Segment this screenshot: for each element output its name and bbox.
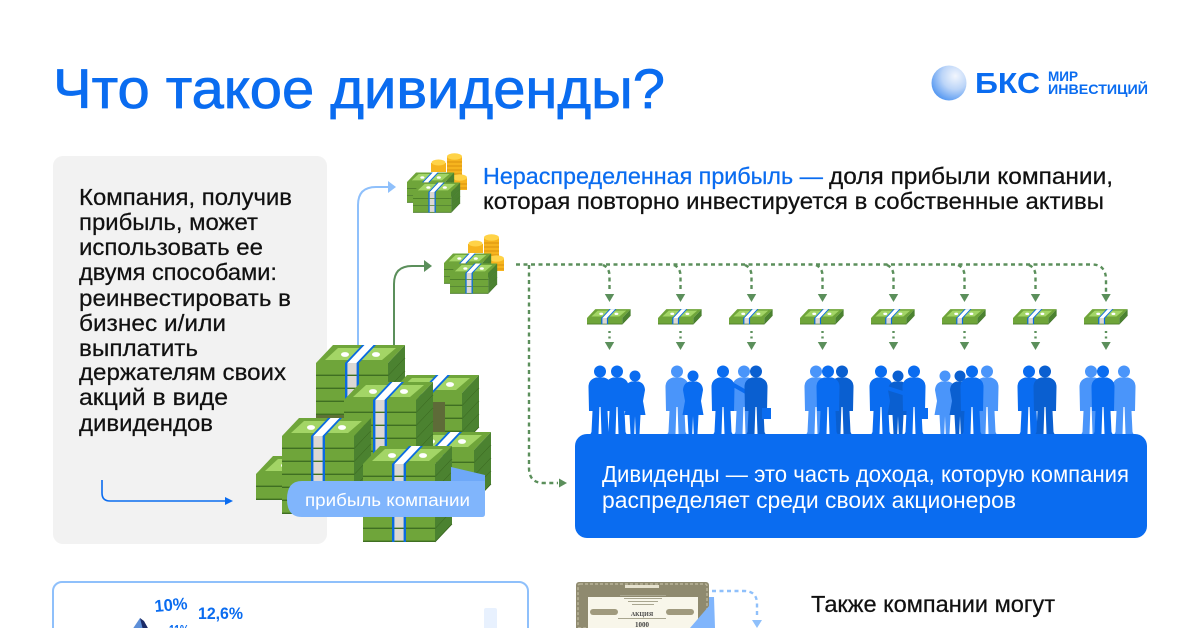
text: retained earnings definition: которая повторно инвестируется в собственные активы: [483, 188, 1104, 214]
dashed arrows: dividend distribution: [516, 264, 1106, 483]
icon: retained earnings cash and coins: [407, 153, 467, 213]
panel: dividends definition: [575, 434, 1147, 538]
logo: BCS Mir Investiciy: БКС: [975, 68, 1040, 100]
label: company profit: прибыль компании: [305, 490, 470, 510]
chart peak: [132, 618, 149, 628]
explanation text: двумя способами:: [79, 259, 277, 285]
label: company profit: [287, 467, 485, 517]
arrow: to dividend cash: [394, 260, 432, 346]
chart value: 12,6%: 12,6%: [198, 604, 243, 623]
logo: BCS Mir Investiciy: МИР: [1048, 68, 1078, 84]
image: share certificate: [576, 582, 715, 628]
explanation text: выплатить: [79, 335, 198, 361]
arrow: to profit pile: [102, 480, 233, 505]
text: retained earnings definition: доля прибыли компании,: [829, 163, 1113, 189]
logo: BCS Mir Investiciy: [932, 66, 1148, 100]
panel: company profit explanation: [53, 156, 327, 544]
explanation text: дивидендов: [79, 410, 213, 436]
logo: BCS Mir Investiciy: ИНВЕСТИЦИЙ: [1048, 80, 1148, 97]
explanation text: бизнес и/или: [79, 310, 226, 336]
image: share certificate: АКЦИЯ: [631, 612, 654, 618]
silhouettes: shareholders: [588, 366, 1136, 434]
illustration: pile of money: [256, 345, 491, 542]
explanation text: держателям своих: [79, 359, 286, 385]
explanation text: прибыль, может: [79, 209, 258, 235]
explanation text: [79, 184, 292, 436]
text: retained earnings definition: [483, 163, 1113, 214]
text: retained earnings definition: Нераспределенная прибыль —: [483, 163, 823, 189]
chart value: 10%: 10%: [154, 594, 188, 616]
panel: dividends definition: Дивиденды — это часть дохода, которую компания: [602, 461, 1129, 487]
arrow: share certificate to text: [712, 591, 762, 628]
arrowheads: dividend distribution: [559, 294, 1111, 488]
explanation text: акций в виде: [79, 384, 228, 410]
panel: chart card (cropped): [53, 582, 528, 628]
arrow: to retained earnings: [358, 181, 396, 346]
explanation text: использовать ее: [79, 234, 263, 260]
icon: dividend cash and coins: [444, 234, 504, 294]
panel: dividends definition: распределяет среди своих акционеров: [602, 487, 1016, 513]
explanation text: реинвестировать в: [79, 285, 291, 311]
text: also companies can: Также компании могут: [811, 591, 1055, 617]
title: Что такое дивиденды?: [53, 57, 665, 120]
explanation text: Компания, получив: [79, 184, 292, 210]
icons: banknote bundles: [587, 309, 1128, 324]
chart bar: [484, 608, 497, 628]
